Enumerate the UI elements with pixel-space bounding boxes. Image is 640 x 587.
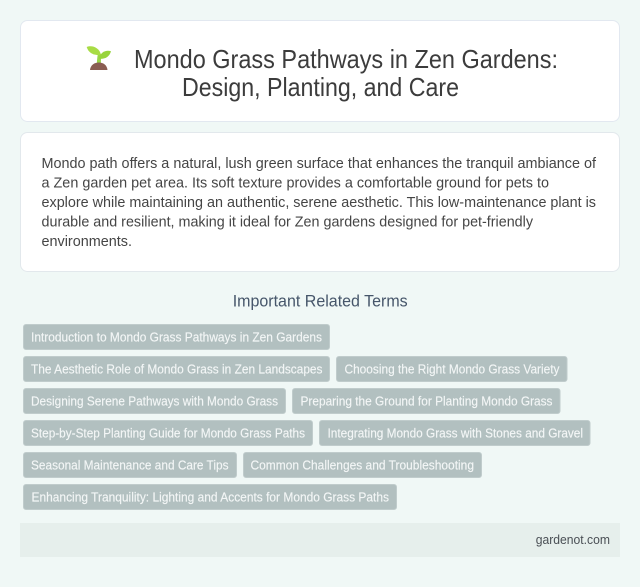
- tag: stones and gravel: [320, 420, 590, 446]
- tag: planting guide: [24, 420, 312, 446]
- title: Design, Planting, and Care: [182, 72, 459, 102]
- title: Mondo Grass Pathways in Zen Gardens:: [134, 44, 558, 74]
- tag: designing pathways: [24, 388, 286, 414]
- tag: seasonal maintenance: [24, 452, 236, 478]
- tag: choosing variety: [336, 356, 567, 382]
- tag: stones and gravel: Integrating Mondo Grass with Stones and Gravel: [328, 426, 583, 440]
- text block: description paragraph: explore while maintaining an authentic, serene aesthetic. This low-maintenance plant is: [42, 194, 596, 211]
- panel: description: [20, 132, 620, 272]
- tag list: [24, 324, 590, 510]
- icon: seedling: [87, 46, 111, 70]
- tag: preparing ground: Preparing the Ground for Planting Mondo Grass: [300, 394, 553, 408]
- tag: common challenges: Common Challenges and Troubleshooting: [250, 458, 474, 472]
- tag: aesthetic role: The Aesthetic Role of Mondo Grass in Zen Landscapes: [31, 362, 323, 376]
- tag: preparing ground: [292, 388, 560, 414]
- footer: gardenot.com: [536, 532, 610, 547]
- text block: description paragraph: a Zen garden pet area. Its soft texture provides a comfortable ground for pets to: [42, 174, 549, 192]
- tag: choosing variety: Choosing the Right Mondo Grass Variety: [344, 362, 560, 376]
- tag: enhancing tranquility: [24, 484, 396, 510]
- heading: related terms: Important Related Terms: [233, 293, 408, 311]
- tag: common challenges: [244, 452, 482, 478]
- footer: [20, 523, 620, 557]
- tag: designing pathways: Designing Serene Pathways with Mondo Grass: [31, 394, 278, 408]
- text block: description paragraph: [42, 155, 597, 250]
- text block: description paragraph: Mondo path offers a natural, lush green surface that enhances the tranquil ambiance of: [42, 155, 597, 172]
- tag: introduction: [24, 324, 330, 350]
- tag: aesthetic role: [24, 356, 330, 382]
- tag: introduction: Introduction to Mondo Grass Pathways in Zen Gardens: [31, 330, 322, 344]
- tag: seasonal maintenance: Seasonal Maintenance and Care Tips: [31, 458, 229, 472]
- tag: planting guide: Step-by-Step Planting Guide for Mondo Grass Paths: [31, 426, 305, 440]
- panel: header: [20, 20, 620, 122]
- text block: description paragraph: durable and resilient, making it ideal for Zen gardens designed for pet-friendly: [42, 214, 533, 230]
- tag: enhancing tranquility: Enhancing Tranquility: Lighting and Accents for Mondo Grass Paths: [32, 490, 389, 504]
- title: [134, 44, 558, 102]
- text block: description paragraph: environments.: [42, 233, 132, 250]
